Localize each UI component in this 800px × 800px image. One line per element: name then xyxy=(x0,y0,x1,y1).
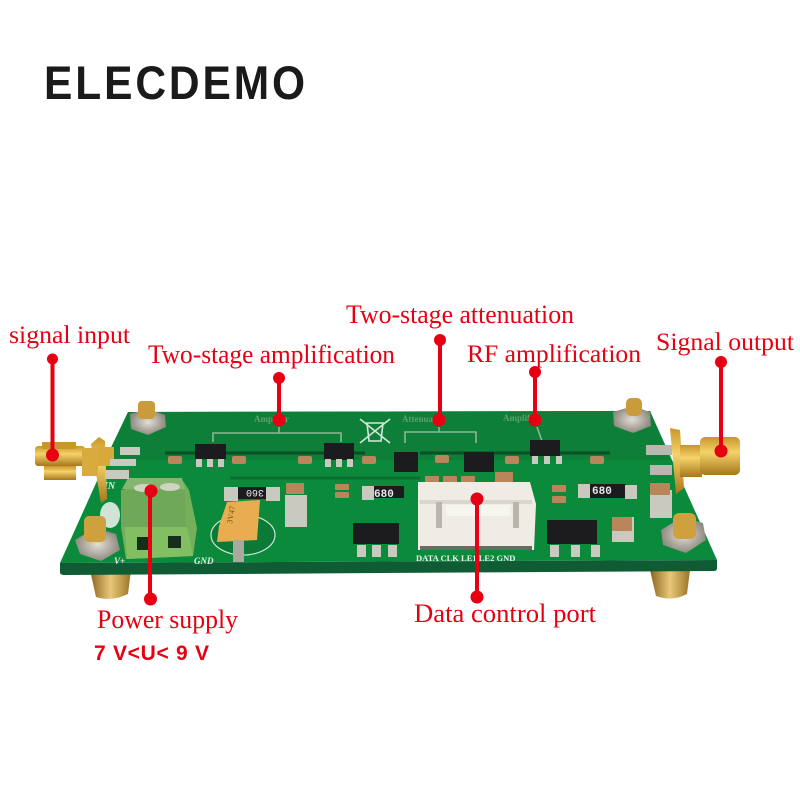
RF amplification pointer xyxy=(528,366,542,426)
data control pointer xyxy=(470,492,484,604)
label: power supply: Power supply xyxy=(97,605,238,634)
silkscreen globe mark xyxy=(100,502,120,528)
silkscreen labels: Amplifer xyxy=(503,413,538,423)
board silkscreen traces xyxy=(165,452,610,454)
title: brand name: ELECDEMO xyxy=(44,56,308,109)
silkscreen brackets xyxy=(213,427,542,443)
silkscreen labels: IN xyxy=(103,481,116,492)
label: two-stage attenuation: Two-stage attenuation xyxy=(346,300,574,329)
circuit board xyxy=(60,411,717,575)
silkscreen labels: V+ xyxy=(114,556,125,566)
signal output pointer xyxy=(714,356,728,458)
icon: recycling cross-out mark xyxy=(360,419,390,443)
callout lines xyxy=(46,334,728,606)
label: two-stage amplification: Two-stage amplification xyxy=(148,340,395,369)
silkscreen labels: Attenuator xyxy=(402,414,444,424)
power supply pointer xyxy=(144,484,158,606)
chip components xyxy=(195,440,626,544)
silkscreen labels: Amplifer xyxy=(254,414,289,424)
label: signal input: signal input xyxy=(9,322,130,349)
SMD pads and passives: 680 xyxy=(592,486,612,498)
two-stage amplification pointer xyxy=(272,372,286,426)
brass standoff posts xyxy=(90,570,690,599)
white header connector xyxy=(418,482,536,550)
label: voltage range: 7 V<U< 9 V xyxy=(94,642,209,665)
silkscreen capacitor circle xyxy=(211,515,275,555)
green screw terminal xyxy=(121,478,197,559)
silkscreen labels xyxy=(103,413,538,566)
SMD pads and passives xyxy=(105,447,672,557)
left SMA connector xyxy=(35,437,114,503)
tantalum capacitor: 3V47 xyxy=(225,505,237,524)
label: data control port: Data control port xyxy=(414,599,597,628)
SMD pads and passives: 680 xyxy=(374,489,394,501)
two-stage attenuation pointer xyxy=(432,334,446,426)
silkscreen labels: GND xyxy=(194,556,214,566)
resistor values: 360 xyxy=(246,486,264,497)
label: signal output: Signal output xyxy=(656,329,794,356)
label: RF amplification: RF amplification xyxy=(467,341,642,368)
mounting nuts and screws xyxy=(75,398,706,561)
signal input pointer xyxy=(46,354,59,462)
tantalum capacitor xyxy=(217,500,260,562)
silkscreen labels: DATA CLK LE1 LE2 GND xyxy=(416,553,515,563)
right SMA connector xyxy=(646,428,740,494)
